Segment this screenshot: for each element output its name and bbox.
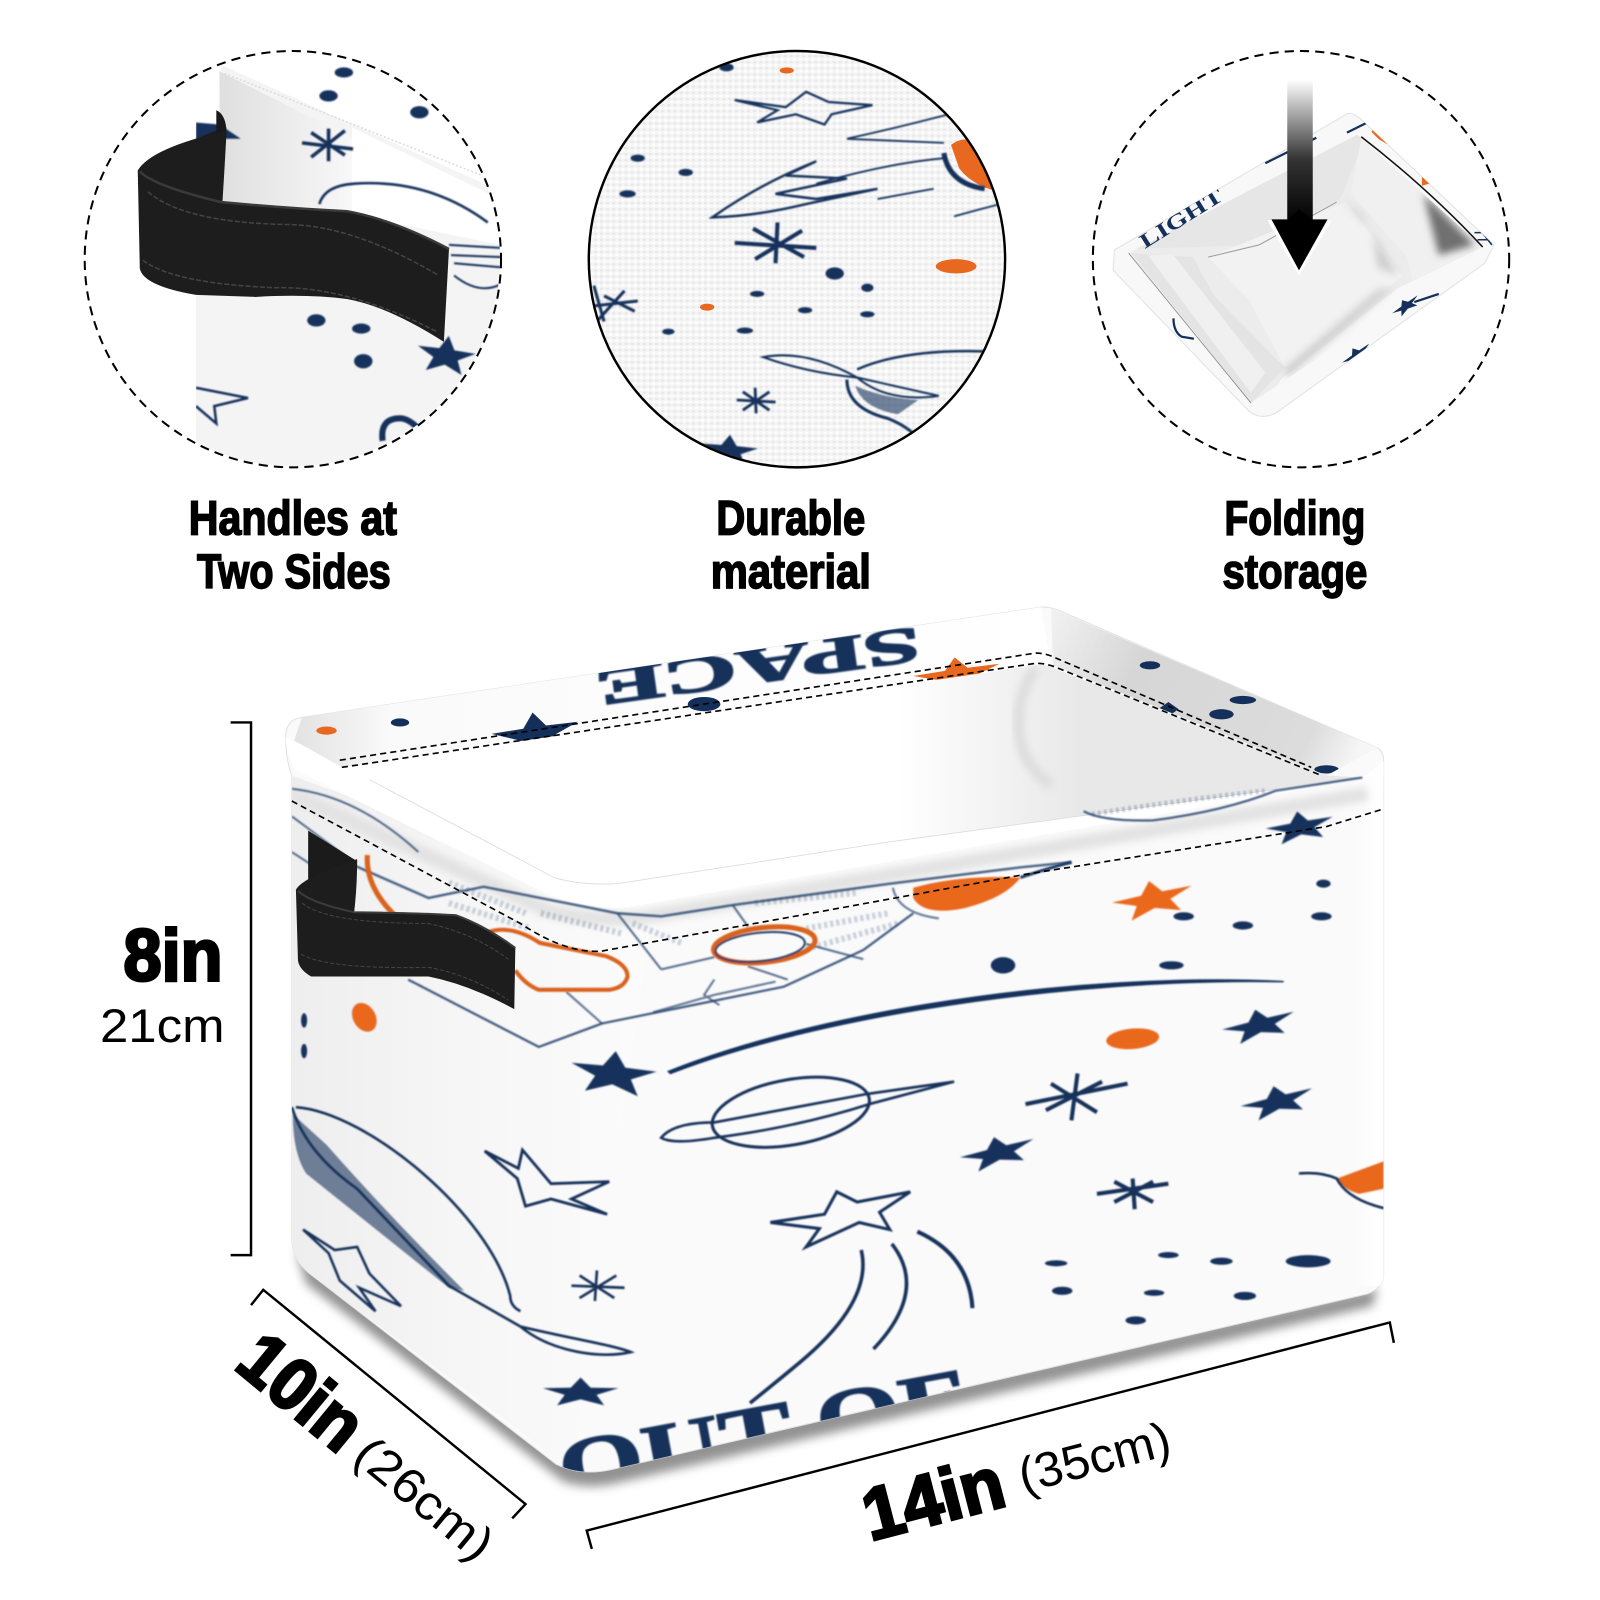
basket opening floor bbox=[342, 665, 1363, 884]
printed pattern bbox=[292, 778, 1384, 1516]
panel: durable material detail circle bbox=[582, 41, 1020, 480]
icon: black handle strap bbox=[138, 110, 449, 342]
heading: durable label: material bbox=[711, 546, 871, 599]
panel: handles detail circle bbox=[85, 41, 522, 480]
stitching lines bbox=[292, 653, 1383, 951]
folded basket print text: LIGHT bbox=[1136, 185, 1228, 253]
left face shading bbox=[292, 776, 376, 1320]
heading: folding label bbox=[1222, 493, 1367, 599]
heading: folding label: storage bbox=[1222, 546, 1367, 599]
rim shading bbox=[292, 794, 1367, 919]
folded basket bbox=[1113, 113, 1494, 416]
basket body bbox=[286, 607, 1384, 1472]
back wall print bbox=[316, 627, 1000, 742]
rocket orange accents bbox=[367, 855, 1071, 990]
front print lettering: OUT OF bbox=[551, 1351, 974, 1516]
dimension: height bbox=[100, 722, 251, 1255]
dimension: width: 14in bbox=[854, 1440, 1013, 1556]
basket shadow bbox=[296, 1250, 1378, 1486]
dashed circle outline bbox=[85, 51, 501, 467]
icon: basket side handle bbox=[296, 831, 515, 1009]
dimension: height: 21cm bbox=[100, 1000, 224, 1052]
white rim band bbox=[286, 737, 1384, 908]
panel: main basket bbox=[286, 607, 1384, 1516]
dimension: height: 8in bbox=[123, 914, 222, 997]
planet hatching bbox=[293, 1114, 464, 1291]
dimension: depth: 10in bbox=[222, 1316, 382, 1467]
heading: folding label: Folding bbox=[1224, 493, 1365, 546]
right edge highlight bbox=[1380, 776, 1384, 1286]
solid circle outline bbox=[589, 51, 1005, 467]
panel: folding storage detail circle bbox=[1093, 51, 1509, 467]
top planet bbox=[1084, 778, 1362, 821]
rocket line art bbox=[292, 789, 1071, 1047]
right wall print bbox=[1140, 661, 1339, 773]
fabric weave close-up bbox=[590, 52, 1004, 466]
dimension: depth bbox=[222, 1290, 526, 1572]
dimension: width bbox=[587, 1322, 1394, 1556]
heading: durable label bbox=[711, 493, 871, 599]
back wall print: SPACE bbox=[592, 615, 923, 716]
dimension: depth: (26cm) bbox=[344, 1427, 504, 1572]
heading: handles label bbox=[189, 493, 397, 599]
interior right wall bbox=[1051, 608, 1378, 776]
heading: handles label: Handles at bbox=[189, 493, 397, 546]
interior back wall bbox=[291, 607, 1051, 767]
dimension: width: (35cm) bbox=[1013, 1412, 1176, 1504]
navy dots and swoosh bbox=[301, 880, 1332, 1324]
navy outline stars, asterisks and comet bbox=[292, 1066, 1168, 1403]
heading: handles label: Two Sides bbox=[197, 546, 391, 599]
right rocket nose bbox=[1299, 1173, 1384, 1208]
orange marks bbox=[347, 873, 1384, 1194]
navy filled stars bbox=[543, 806, 1336, 1405]
fabric close-up bbox=[196, 66, 500, 466]
dashed circle outline bbox=[1093, 51, 1509, 467]
icon: down arrow bbox=[1267, 80, 1332, 276]
heading: durable label: Durable bbox=[716, 493, 865, 546]
